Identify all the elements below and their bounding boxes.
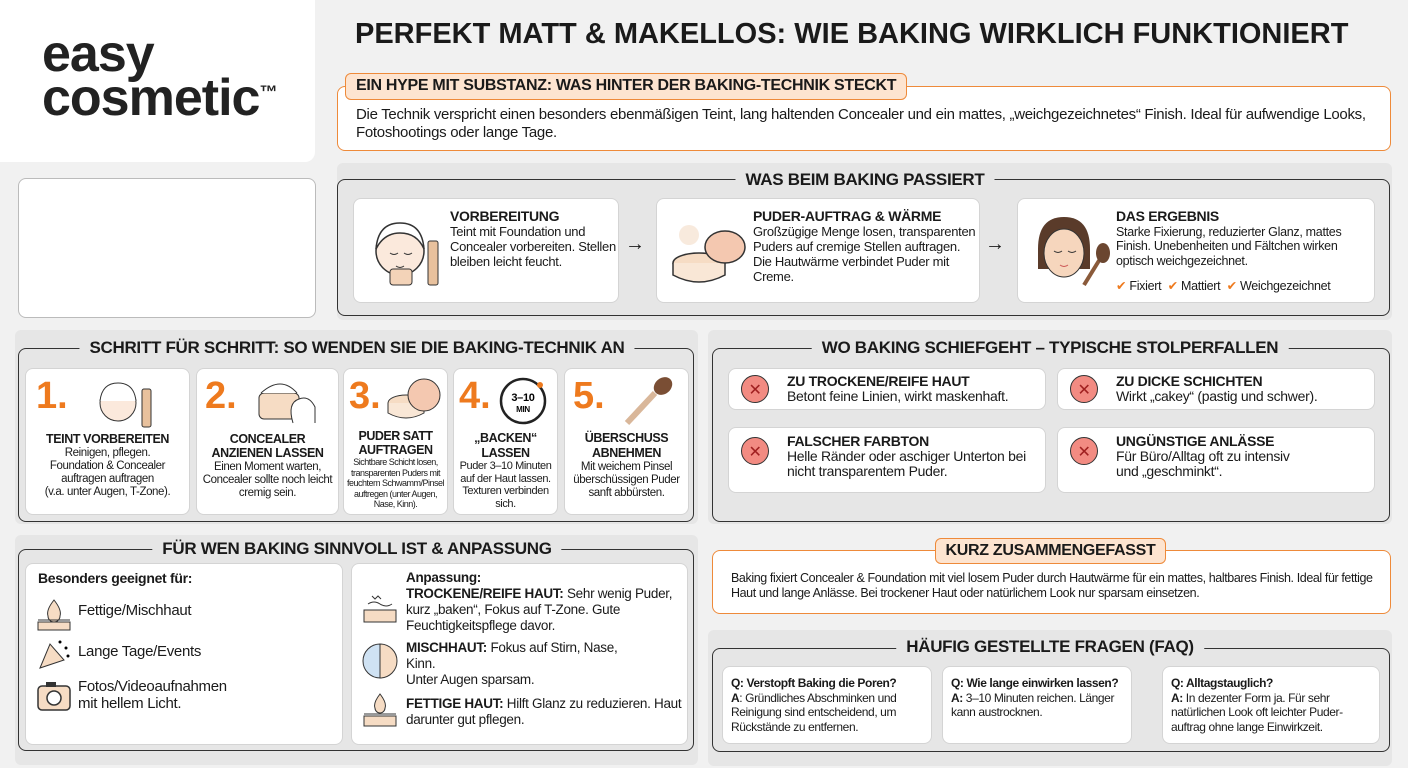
heading: WAS BEIM BAKING PASSIERT bbox=[745, 170, 985, 189]
heading: HÄUFIG GESTELLTE FRAGEN (FAQ) bbox=[906, 637, 1194, 656]
card: puder-auftrag: PUDER-AUFTRAG & WÄRME bbox=[753, 208, 941, 224]
panel: schritt für schritt bbox=[15, 330, 698, 524]
step 3: 3. bbox=[349, 375, 381, 417]
panel: für wen bbox=[15, 535, 698, 765]
pitfall 1: ZU TROCKENE/REIFE HAUT bbox=[787, 373, 969, 389]
step 5: ABNEHMEN bbox=[592, 446, 661, 460]
card: anpassung: FETTIGE HAUT: Hilft Glanz zu reduzieren. Haut darunter gut pflegen. bbox=[406, 696, 681, 727]
card: anpassung: Unter Augen sparsam. bbox=[406, 672, 534, 687]
panel: faq bbox=[708, 630, 1392, 766]
icon: dry skin bbox=[364, 595, 396, 622]
pitfall 4: und „geschminkt“. bbox=[1116, 463, 1222, 479]
arrow: → bbox=[985, 233, 1005, 255]
intro heading tag: EIN HYPE MIT SUBSTANZ: WAS HINTER DER BAKING-TECHNIK STECKT bbox=[356, 77, 896, 94]
step 3: Sichtbare Schicht losen, transparenten Puders mit feuchtem Schwamm/Pinsel auftregen (unter Augen, Nase, Kinn). bbox=[347, 457, 444, 509]
icon: skin drop bbox=[38, 599, 70, 630]
intro box: Die Technik verspricht einen besonders ebenmäßigen Teint, lang haltenden Concealer und ein mattes, „weichgezeichnetes“ Finish. Ideal für aufwendige Looks, Fotoshootings oder lange Tage. bbox=[356, 106, 1366, 141]
step 2: 2. bbox=[205, 375, 237, 417]
pitfall 3: Helle Ränder oder aschiger Unterton bei nicht transparentem Puder. bbox=[787, 448, 1026, 479]
panel: stolperfallen bbox=[708, 330, 1392, 524]
step 3: PUDER SATT bbox=[359, 429, 432, 443]
card: anpassung: Anpassung: bbox=[406, 570, 481, 585]
intro heading tag bbox=[345, 73, 907, 100]
step 1: TEINT VORBEREITEN bbox=[46, 432, 169, 446]
card: geeignet für: mit hellem Licht. bbox=[78, 695, 181, 712]
arrow: → bbox=[625, 233, 645, 255]
card: geeignet für bbox=[25, 563, 343, 745]
faq 2: A: 3–10 Minuten reichen. Länger kann austrocknen. bbox=[951, 690, 1114, 719]
step 1: auftragen auftragen bbox=[61, 473, 154, 485]
faq 3: Q: Alltagstauglich? bbox=[1171, 676, 1273, 690]
card: vorbereitung: Teint mit Foundation und Concealer vorbereiten. Stellen bleiben leicht feucht. bbox=[450, 224, 616, 269]
logo text: cosmetic™ bbox=[42, 69, 276, 127]
icon: oily skin bbox=[364, 693, 396, 726]
pitfall 1: Betont feine Linien, wirkt maskenhaft. bbox=[787, 388, 1008, 404]
step 4: Puder 3–10 Minuten auf der Haut lassen. Texturen verbinden sich. bbox=[460, 460, 551, 510]
card: geeignet für: Lange Tage/Events bbox=[78, 643, 201, 660]
card: anpassung bbox=[351, 563, 688, 745]
step 5: 5. bbox=[573, 375, 605, 417]
pitfall 2: ZU DICKE SCHICHTEN bbox=[1116, 373, 1262, 389]
icon: powder pot bbox=[672, 225, 746, 283]
pitfall 4: Für Büro/Alltag oft zu intensiv bbox=[1116, 448, 1290, 464]
step 5: Mit weichem Pinsel überschüssigen Puder sanft abbürsten. bbox=[573, 461, 680, 499]
heading tag: kurz bbox=[935, 538, 1166, 564]
faq 3 bbox=[1162, 666, 1380, 744]
step 4: MIN bbox=[516, 405, 530, 414]
icon: face with concealer bbox=[375, 222, 438, 286]
card: vorbereitung bbox=[353, 198, 619, 303]
heading tag: kurz: KURZ ZUSAMMENGEFASST bbox=[945, 542, 1156, 559]
panel: was beim baking passiert bbox=[337, 163, 1392, 320]
card: puder-auftrag: Großzügige Menge losen, transparenten Puders auf cremige Stellen auftragen. Die Hautwärme verbindet Puder mit Creme. bbox=[753, 224, 975, 284]
card: anpassung: Kinn. bbox=[406, 656, 435, 671]
step 4 bbox=[453, 368, 558, 515]
card: das ergebnis bbox=[1017, 198, 1375, 303]
step 3: AUFTRAGEN bbox=[359, 443, 432, 457]
card: geeignet für: Fettige/Mischhaut bbox=[78, 602, 191, 619]
faq 2: Q: Wie lange einwirken lassen? bbox=[951, 676, 1118, 690]
card: anpassung: MISCHHAUT: Fokus auf Stirn, Nase, bbox=[406, 640, 617, 655]
card: geeignet für: Besonders geeignet für: bbox=[38, 570, 192, 586]
step 1: 1. bbox=[36, 375, 68, 417]
step 2 bbox=[196, 368, 339, 515]
step 1 bbox=[25, 368, 190, 515]
faq 2 bbox=[942, 666, 1132, 744]
heading: FÜR WEN BAKING SINNVOLL IST & ANPASSUNG bbox=[162, 539, 552, 558]
icon: face with brush bbox=[1038, 217, 1110, 286]
card: das ergebnis: Starke Fixierung, reduzierter Glanz, mattes Finish. Unebenheiten und Fältchen wirken optisch weichgezeichnet. bbox=[1116, 224, 1341, 268]
step 4: „BACKEN“ bbox=[474, 431, 537, 445]
step 3 bbox=[343, 368, 448, 515]
logo text: easy bbox=[42, 25, 154, 83]
intro box bbox=[337, 86, 1391, 151]
faq 1 bbox=[722, 666, 932, 744]
panel: kurz zusammengefasst bbox=[712, 550, 1391, 614]
card: anpassung: TROCKENE/REIFE HAUT: Sehr wenig Puder, kurz „baken“, Fokus auf T-Zone. Gute Feuchtigkeitspflege davor. bbox=[406, 586, 672, 633]
card: vorbereitung: VORBEREITUNG bbox=[450, 208, 559, 224]
step 1: Foundation & Concealer bbox=[50, 460, 165, 472]
step 4: 4. bbox=[459, 375, 491, 417]
icon: party bbox=[39, 640, 70, 669]
faq 1: Q: Verstopft Baking die Poren? bbox=[731, 676, 896, 690]
step 1: Reinigen, pflegen. bbox=[65, 447, 150, 459]
faq 3: A: In dezenter Form ja. Für sehr natürlichen Look oft leichter Puder-auftrag ohne lange Einwirkzeit. bbox=[1171, 690, 1343, 734]
checks: ✔ Fixiert ✔ Mattiert ✔ Weichgezeichnet bbox=[1116, 279, 1330, 293]
pitfall 3: FALSCHER FARBTON bbox=[787, 433, 929, 449]
heading: SCHRITT FÜR SCHRITT: SO WENDEN SIE DIE BAKING-TECHNIK AN bbox=[89, 338, 625, 357]
step 2: CONCEALER bbox=[230, 432, 305, 446]
card: puder-auftrag bbox=[656, 198, 980, 303]
step 4: 3–10 bbox=[511, 392, 535, 404]
pitfall 1 bbox=[728, 368, 1046, 410]
title: PERFEKT MATT & MAKELLOS: WIE BAKING WIRKLICH FUNKTIONIERT bbox=[355, 18, 1348, 50]
logo text bbox=[42, 25, 276, 127]
icon: mixed skin bbox=[362, 644, 398, 678]
icon: camera bbox=[37, 682, 71, 711]
pitfall 4 bbox=[1057, 427, 1375, 493]
panel: kurz zusammengefasst: Baking fixiert Concealer & Foundation mit viel losem Puder durch Hautwärme für ein mattes, haltbares Finish. Ideal für fettige Haut und lange Anlässe. Bei trockener Haut oder natürlichem Look nur sparsam einsetzen. bbox=[731, 571, 1373, 600]
pitfall 2: Wirkt „cakey“ (pastig und schwer). bbox=[1116, 388, 1317, 404]
step 2: ANZIENEN LASSEN bbox=[211, 446, 324, 460]
logo panel bbox=[0, 0, 315, 162]
card: das ergebnis: DAS ERGEBNIS bbox=[1116, 208, 1219, 224]
pitfall 2 bbox=[1057, 368, 1375, 410]
step 5: ÜBERSCHUSS bbox=[585, 431, 668, 445]
step 4: LASSEN bbox=[481, 446, 530, 460]
step 5 bbox=[564, 368, 689, 515]
step 2: Einen Moment warten, Concealer sollte noch leicht cremig sein. bbox=[203, 461, 332, 499]
card: geeignet für: Fotos/Videoaufnahmen bbox=[78, 678, 227, 695]
pitfall 3 bbox=[728, 427, 1046, 493]
heading: WO BAKING SCHIEFGEHT – TYPISCHE STOLPERFALLEN bbox=[822, 338, 1278, 357]
empty placeholder box bbox=[18, 178, 316, 318]
faq 1: A: Gründliches Abschminken und Reinigung sind entscheidend, um Rückstände zu entfernen. bbox=[731, 690, 896, 734]
pitfall 4: UNGÜNSTIGE ANLÄSSE bbox=[1116, 433, 1274, 449]
step 1: (v.a. unter Augen, T-Zone). bbox=[45, 486, 170, 498]
